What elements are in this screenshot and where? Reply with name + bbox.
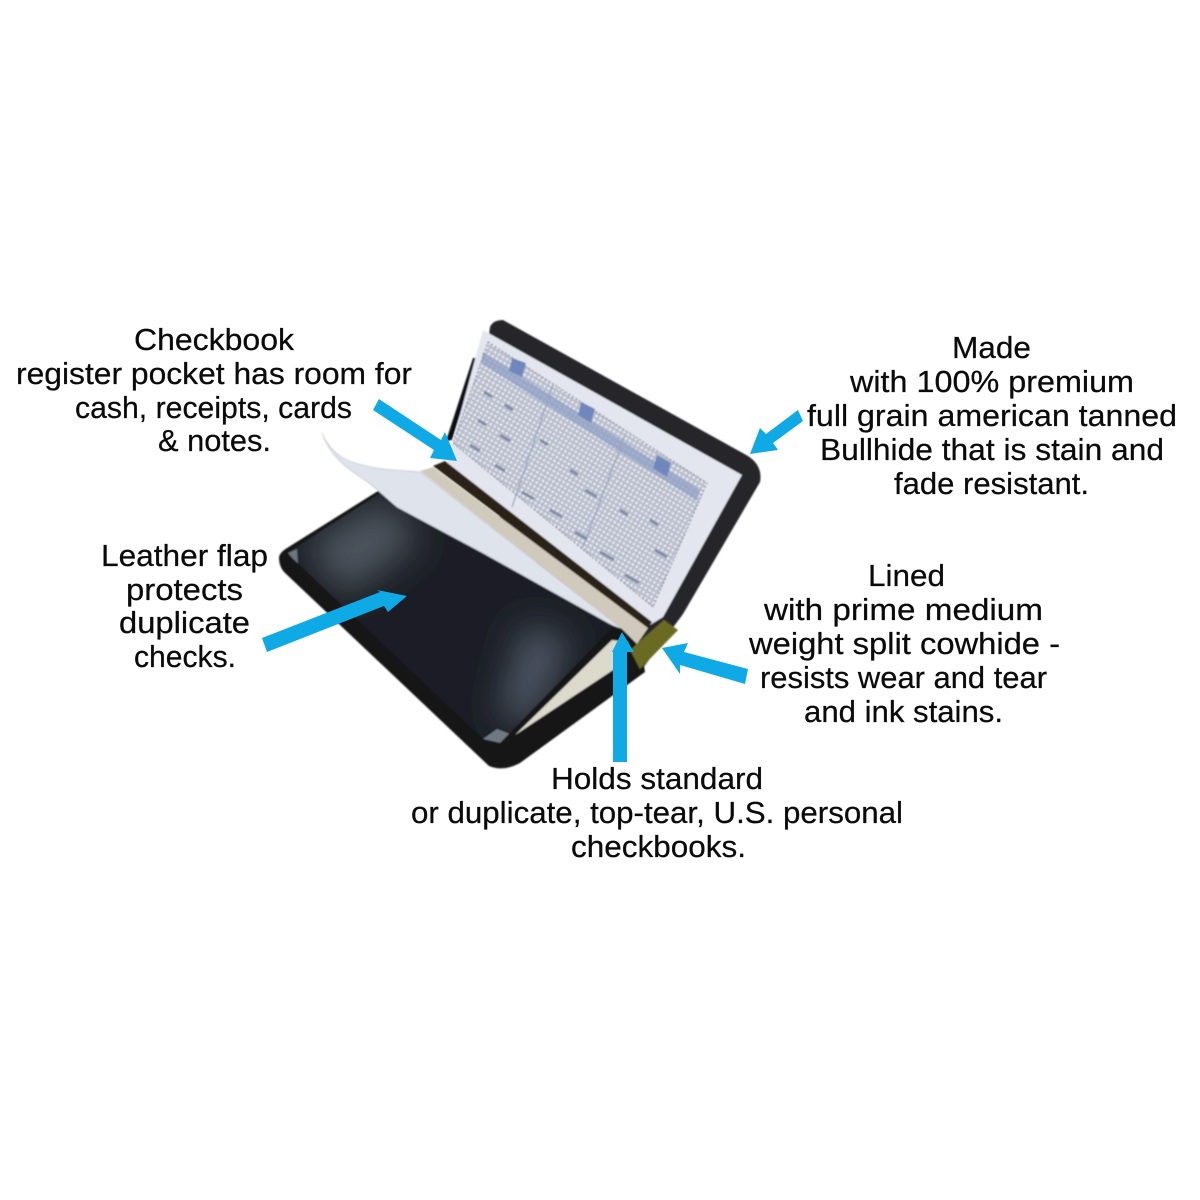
text: premium bullhide: full grain american tanned [807, 398, 1177, 433]
front cover [279, 491, 645, 768]
leather flap [287, 493, 613, 743]
register card [447, 330, 742, 625]
text: premium bullhide: with 100% premium [849, 364, 1134, 399]
text: lining [748, 558, 1060, 729]
arrow: holds checkbooks [612, 632, 634, 762]
text: lining: and ink stains. [804, 694, 1003, 729]
text: leather flap: duplicate [119, 605, 250, 640]
brown spine line [433, 461, 652, 628]
arrow: premium bullhide [750, 410, 803, 454]
arrow: register pocket [373, 399, 457, 461]
text: premium bullhide [807, 330, 1177, 501]
text: lining: weight split cowhide - [748, 626, 1060, 661]
text: lining: Lined [868, 558, 945, 593]
check stub strip [420, 467, 648, 644]
arrow: leather flap [262, 590, 407, 652]
arrow: lining [662, 643, 748, 684]
text: register pocket [16, 322, 412, 458]
text: premium bullhide: Made [952, 330, 1031, 365]
text: holds checkbooks: Holds standard [551, 761, 763, 796]
text: premium bullhide: Bullhide that is stain and [820, 432, 1164, 467]
text: leather flap: checks. [134, 639, 236, 674]
text: holds checkbooks [411, 761, 903, 864]
duplicate checks, folded back [322, 433, 621, 628]
text: premium bullhide: fade resistant. [894, 466, 1089, 501]
text: lining: with prime medium [763, 592, 1043, 627]
text: holds checkbooks: or duplicate, top-tear, U.S. personal [411, 795, 903, 830]
text: register pocket: cash, receipts, cards [75, 390, 352, 425]
back cover [470, 320, 760, 672]
text: register pocket: & notes. [158, 423, 271, 458]
inner pocket slit [446, 358, 478, 441]
text: leather flap: protects [126, 572, 243, 607]
cream inner page [515, 640, 628, 735]
text: register pocket: Checkbook [134, 322, 295, 357]
checkbook cover photo [279, 320, 760, 768]
text: leather flap: Leather flap [101, 538, 268, 573]
text: lining: resists wear and tear [760, 660, 1047, 695]
olive lining [630, 620, 678, 669]
text: leather flap [101, 538, 268, 674]
text: holds checkbooks: checkbooks. [571, 829, 746, 864]
text: register pocket: register pocket has room for [16, 356, 412, 391]
